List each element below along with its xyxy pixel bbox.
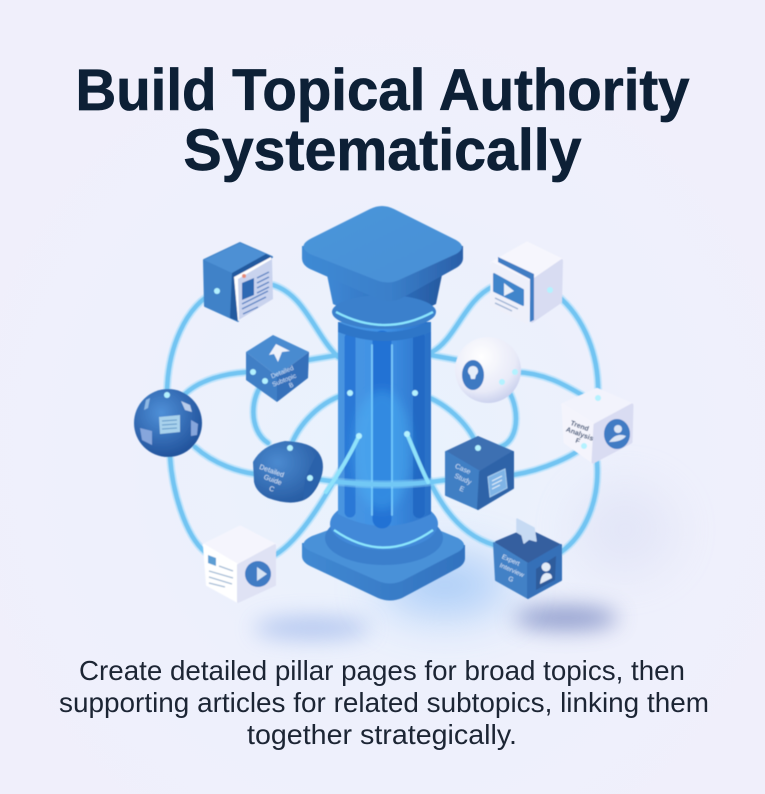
node: detailed guide rounded cube: Detailed: [258, 464, 285, 479]
body text: supporting articles for related subtopics, linking them: [59, 687, 709, 718]
title: Build Topical Authority: [76, 58, 690, 123]
pillar: [302, 206, 465, 600]
node: play cube: [491, 243, 562, 323]
node: document cube: [204, 243, 273, 321]
node: detailed guide rounded cube: Guide: [263, 474, 283, 487]
pillar cap: [302, 206, 463, 301]
node: detailed guide rounded cube: [253, 441, 323, 503]
pillar shaft: [338, 322, 431, 526]
node: trend analysis cube: Analysis: [565, 426, 594, 443]
pillar capital: [326, 270, 443, 341]
pillar torus: [325, 498, 443, 565]
ground shadows: [254, 485, 675, 639]
node: detailed subtopic cube: Subtopic: [271, 372, 298, 389]
node: trend analysis cube: [563, 390, 632, 462]
node: case study cube: E: [458, 485, 465, 494]
node: detailed guide rounded cube: C: [268, 485, 275, 494]
center line through pillar: [310, 434, 446, 492]
body text: Create detailed pillar pages for broad topics, then: [79, 655, 685, 686]
title: [76, 58, 690, 183]
body text: together strategically.: [247, 719, 517, 750]
node: case study cube: [446, 437, 513, 509]
node: trend analysis cube: F: [574, 438, 581, 446]
node: expert interview cube: G: [507, 575, 514, 584]
node: detailed subtopic cube: B: [288, 382, 295, 390]
illustration: [134, 206, 632, 602]
pillar flutes: [350, 338, 419, 519]
node: trend analysis cube: Trend: [569, 420, 590, 433]
node: expert interview cube: [494, 519, 561, 598]
node: play document cube: [204, 527, 275, 602]
pillar base plinth: [302, 512, 465, 600]
node: expert interview cube: Expert: [501, 554, 521, 568]
glow endpoints: [164, 287, 601, 481]
body text: [59, 655, 709, 750]
title: Systematically: [184, 118, 582, 183]
node: case study cube: Case: [454, 463, 472, 476]
node: blue sphere: [134, 389, 202, 457]
node: detailed subtopic cube: [246, 335, 309, 402]
node: white sphere: [455, 337, 521, 403]
node: case study cube: Study: [453, 473, 473, 487]
connection lines: [167, 285, 598, 555]
node: expert interview cube: Interview: [498, 562, 525, 579]
node: detailed subtopic cube: Detailed: [270, 365, 295, 380]
